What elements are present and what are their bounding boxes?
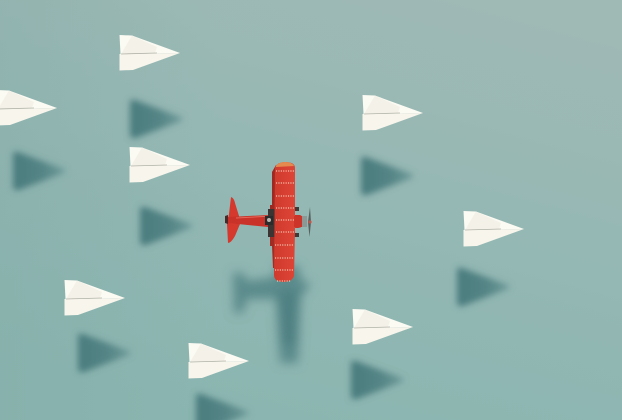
lower wing edge	[270, 165, 276, 212]
shadows of paper planes	[13, 100, 510, 420]
main wing	[274, 162, 295, 282]
shadow of biplane	[233, 266, 311, 363]
struts and cockpit	[268, 209, 275, 237]
red biplane	[225, 162, 312, 282]
engine and propeller	[294, 216, 306, 227]
paper planes	[0, 35, 524, 378]
fuselage	[228, 215, 306, 228]
wing rib stitching	[275, 171, 294, 281]
tail fin	[227, 197, 240, 243]
